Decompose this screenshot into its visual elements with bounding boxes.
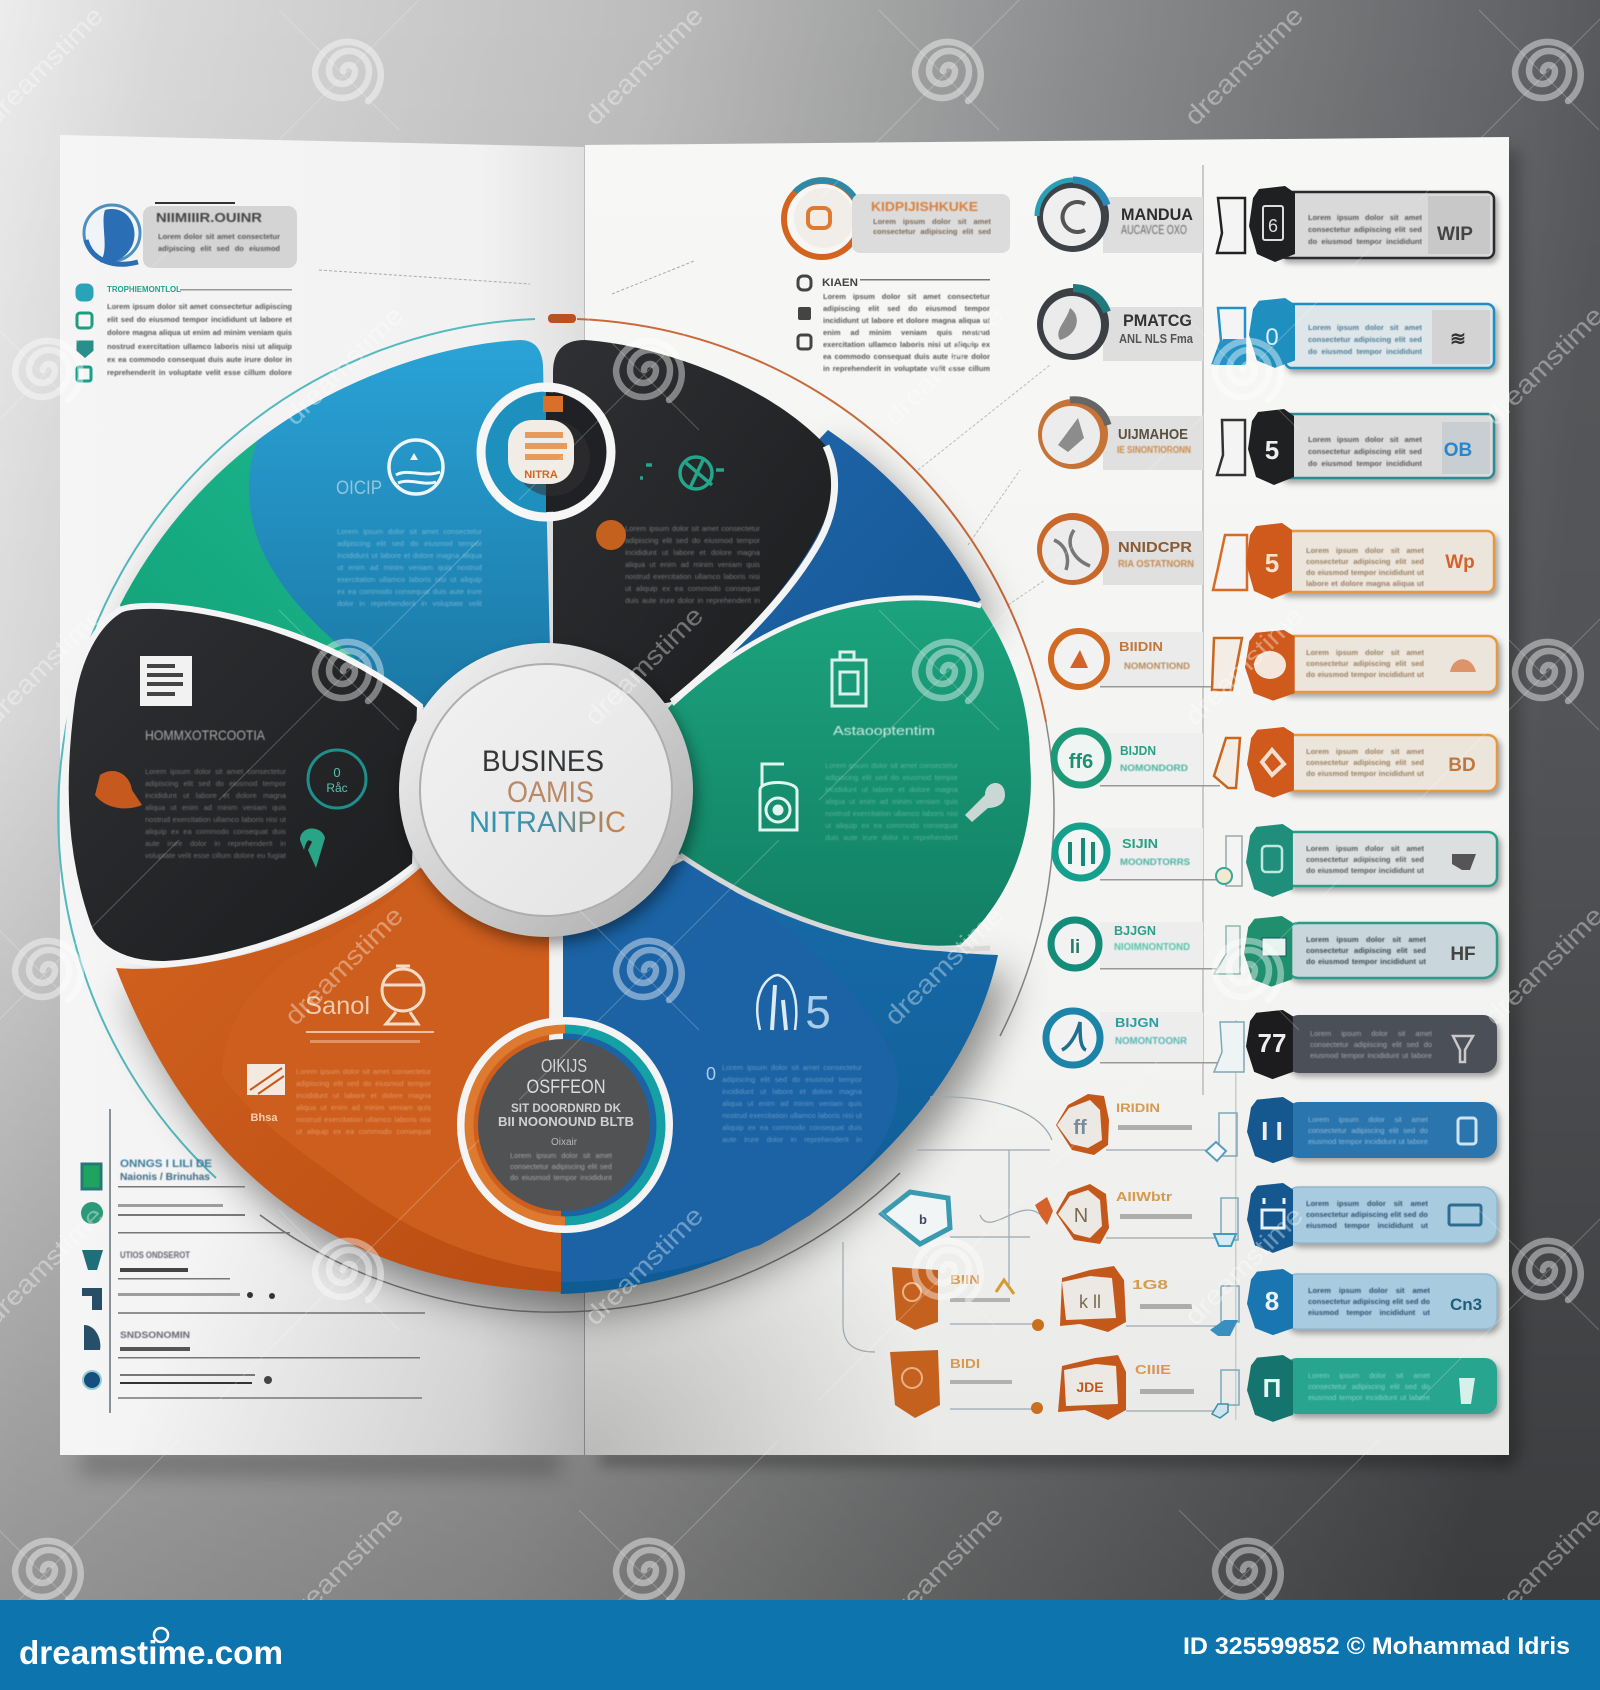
green petal title: Astaooptentim (833, 723, 935, 738)
right column banner 4 (1213, 523, 1494, 599)
icon: teal circle (308, 750, 366, 808)
title line one: BUSINES (482, 745, 604, 778)
card 6 (1054, 731, 1220, 786)
footer logo text: dreamstime.com (19, 1634, 283, 1671)
watermark overlay: dreamstime (278, 900, 409, 1031)
card 8 (1051, 920, 1218, 970)
orange shield two: BIDI (950, 1356, 980, 1371)
big number five: 5 (805, 986, 831, 1038)
footer logo mark (154, 1628, 168, 1642)
watermark overlay: dreamstime (1478, 300, 1600, 431)
icon: orange dot (596, 520, 626, 550)
watermark overlay: dreamstime (1478, 1500, 1600, 1631)
watermark overlay: dreamstime (878, 1500, 1009, 1631)
petal: deep blue inner (561, 860, 898, 1282)
card 4 (1037, 513, 1203, 585)
right column banner 9: 77 (1258, 1028, 1286, 1058)
card 1 (1037, 180, 1203, 253)
right column banner 13 (1212, 1355, 1497, 1422)
right column banner 3 (1217, 409, 1494, 485)
right column banner 5 (1212, 630, 1497, 701)
panel: top-left header and notes (77, 202, 297, 381)
card 5 (1051, 631, 1215, 688)
card 9 (1046, 1011, 1218, 1065)
card 12: 1G8 (1132, 1277, 1168, 1292)
icon: white chart box (247, 1064, 285, 1095)
icon: water circle (389, 440, 443, 494)
wedge: green top left (120, 440, 430, 720)
icon: blue crescent badge (84, 205, 140, 264)
pie chart (66, 340, 1031, 1294)
right column banner 10 (1206, 1097, 1497, 1163)
watermark overlay: dreamstime (1178, 600, 1309, 731)
orange shield one: BIIN (950, 1272, 980, 1287)
petal: orange inner (222, 868, 561, 1272)
wedge: orange bottom (116, 868, 561, 1292)
white gap between orange and blue (549, 925, 563, 1045)
card 12 (1060, 1266, 1192, 1332)
icon: green hook (300, 828, 325, 868)
lower middle cards (882, 1094, 1194, 1420)
icon: orange book stack: NITRA (524, 469, 558, 481)
footer band (0, 1600, 1600, 1690)
right column banner 7 (1216, 824, 1497, 897)
heading one: ONNGS I LILI DE (120, 1158, 212, 1170)
watermark overlay: dreamstime (278, 300, 409, 431)
heading three: SNDSONOMIN (120, 1330, 190, 1340)
right column banner 3: 5 (1265, 435, 1279, 465)
card 3 (1038, 399, 1203, 470)
watermark overlay: dreamstime (1178, 0, 1309, 131)
right column banner 1: 6 (1268, 216, 1278, 236)
petal: dark left (66, 606, 420, 964)
vertical dividers (1202, 165, 1236, 1420)
panel: top-centre header and notes (784, 180, 1010, 375)
right column banner 12: 8 (1265, 1286, 1279, 1316)
icon: green recycle (640, 457, 724, 489)
right column banner 2 (1213, 298, 1494, 368)
card 2: ANL NLS Fma (1119, 331, 1194, 346)
watermark overlay: dreamstime (1178, 1200, 1309, 1331)
shadows of the pages (80, 150, 1518, 1476)
right column banner 6: BD (1448, 755, 1476, 776)
right column banner 8: HF (1450, 944, 1476, 965)
title line three: NITRANPIC (469, 806, 626, 839)
left page (60, 135, 584, 1455)
card 11 (1035, 1184, 1192, 1244)
blue petal label: OICIP (336, 478, 382, 499)
card 5: NOMONTIOND (1124, 661, 1191, 671)
inset circle: bottom disc: Oixair (551, 1137, 578, 1148)
card 6: NOMONDORD (1120, 763, 1189, 773)
right column banner 4: Wp (1445, 552, 1475, 573)
card 10: ff (1073, 1117, 1087, 1139)
deep blue petal contents (706, 975, 862, 1146)
lower connector lines (843, 1097, 1225, 1411)
icon: small zero: 0 (706, 1064, 716, 1084)
watermark overlay: dreamstime (878, 900, 1009, 1031)
lower-left notes (81, 1109, 425, 1413)
icon: teal circle: Råc (326, 781, 348, 795)
card 6: BIJDN (1120, 743, 1156, 758)
card 1: MANDUA (1121, 205, 1193, 224)
card 6: ff6 (1069, 751, 1093, 773)
wedge: blue top right (700, 430, 981, 720)
dark left title: HOMMXOTRCOOTIA (145, 727, 266, 743)
legend icons (77, 285, 92, 381)
right column banner 3: OB (1444, 440, 1472, 461)
green petal text: Lorem ipsum dolor sit amet consectetur adipiscing elit sed do eiusmod tempor incididunt ut labore et dolore magna aliqua ut enim ad minim veniam quis nostrud exercitation ullamco laboris nisi ut aliquip ex ea commodo consequat duis aute irure dolor in reprehenderit (825, 761, 958, 842)
icon: camera bottle (760, 764, 797, 830)
orange petal contents (247, 966, 434, 1138)
watermark overlay: dreamstime (578, 1200, 709, 1331)
teal drop badge (882, 1192, 950, 1244)
icon: helmet figure (382, 966, 424, 1024)
card 1: AUCAVCE OXO (1121, 222, 1187, 237)
right column banner 6 (1214, 727, 1497, 798)
petal: green right (600, 598, 1031, 949)
card 11: N (1074, 1205, 1088, 1227)
watermark overlay: dreamstime (578, 600, 709, 731)
icon: pin (965, 783, 1005, 822)
right column banner 2: ≋ (1450, 329, 1466, 350)
outer ring of the pie (58, 314, 1054, 1312)
disc caption lines: SIT DOORDNRD DK (511, 1101, 621, 1115)
disc sub heading: OSFFEON (526, 1077, 606, 1098)
right column banner 12: Cn3 (1450, 1295, 1482, 1314)
notes heading: KIAEN (822, 277, 858, 289)
card 11: AIIWbtr (1116, 1189, 1172, 1204)
icon caption: Bhsa (251, 1112, 278, 1124)
orange shield one (892, 1267, 1014, 1330)
card 9: NOMONTOONR (1115, 1036, 1188, 1047)
header card (143, 202, 297, 268)
icon: document (832, 652, 866, 706)
right column banner 13: П (1263, 1373, 1281, 1403)
card 10 (1056, 1094, 1192, 1155)
orange shield two (890, 1350, 1012, 1418)
card 8: BJJGN (1114, 923, 1156, 938)
card 7: SIJIN (1122, 836, 1158, 851)
wedge: deep blue bottom (545, 860, 998, 1294)
heading two: UTIOS ONDSEROT (120, 1250, 190, 1260)
central hub title (399, 643, 693, 937)
card 8: NIOIMNONTOND (1114, 942, 1190, 953)
right column banner 9 (1214, 1010, 1497, 1079)
inset circle: bottom disc: BII NOONOUND BLTB (498, 1114, 634, 1129)
card 9: BIJGN (1115, 1015, 1159, 1030)
right column banner 10: I I (1261, 1116, 1283, 1146)
card 10: IRIDIN (1116, 1101, 1160, 1115)
card 2 (1037, 288, 1203, 361)
legend icons (81, 1164, 103, 1389)
watermark overlay: dreamstime (278, 1500, 409, 1631)
card 8: li (1070, 937, 1080, 958)
petal: dark top (553, 340, 835, 720)
right column banner 1: WIP (1437, 224, 1473, 245)
card 12: k ll (1079, 1292, 1101, 1312)
notes heading: TROPHIEMONTLOL (107, 285, 181, 294)
watermark overlay: dreamstime (1478, 900, 1600, 1031)
inset circle: bottom disc (461, 1021, 669, 1229)
rules and text (118, 1186, 425, 1399)
header card: NIIMIIIR.OUINR (156, 210, 263, 225)
card 2: PMATCG (1123, 311, 1192, 330)
title line two: OAMIS (507, 776, 594, 809)
card 3: UIJMAHOE (1118, 426, 1188, 443)
petal: light blue top (249, 340, 550, 720)
right column banner 2: 0 (1265, 324, 1279, 351)
icon: orange badge (784, 180, 860, 257)
right column banner 4: 5 (1265, 548, 1279, 578)
header card: KIDPIJISHKUKE (871, 199, 978, 214)
teal drop badge: b (919, 1212, 927, 1227)
right page (585, 137, 1509, 1455)
orange connector dots (1031, 1319, 1044, 1414)
card 4: RIA OSTATNORN (1118, 559, 1194, 570)
watermark overlay: dreamstime (878, 300, 1009, 431)
right column banner 12 (1210, 1269, 1497, 1336)
card 13: JDE (1076, 1379, 1104, 1395)
watermark overlay: dreamstime (578, 0, 709, 131)
card 3: IE SINONTIORONN (1117, 445, 1191, 456)
right column banner 11 (1214, 1183, 1497, 1253)
lower-left notes: Naionis / Brinuhas (120, 1172, 210, 1183)
card 4: NNIDCPR (1118, 539, 1192, 556)
icon: teal circle: 0 (333, 765, 341, 780)
right column banner 1 (1217, 186, 1494, 262)
middle column cards (1037, 180, 1220, 1065)
right column banner 8 (1214, 916, 1497, 987)
legend icons (798, 276, 811, 349)
inset circle: top (481, 387, 611, 517)
footer credit: ID 325599852 © Mohammad Idris (1183, 1633, 1570, 1660)
disc heading: OIKIJS (541, 1056, 587, 1076)
card 7 (1055, 826, 1220, 880)
icon: rocket (757, 975, 796, 1030)
icon: orange blob (95, 771, 142, 808)
card 13 (1058, 1355, 1194, 1420)
header card (852, 194, 1010, 253)
card 5: BIIDIN (1119, 639, 1163, 654)
orange petal label: Sanol (305, 992, 370, 1020)
card 13: CIIIE (1135, 1362, 1171, 1377)
icon: document sheet (140, 656, 192, 706)
card 7: MOONDTORRS (1120, 857, 1190, 867)
